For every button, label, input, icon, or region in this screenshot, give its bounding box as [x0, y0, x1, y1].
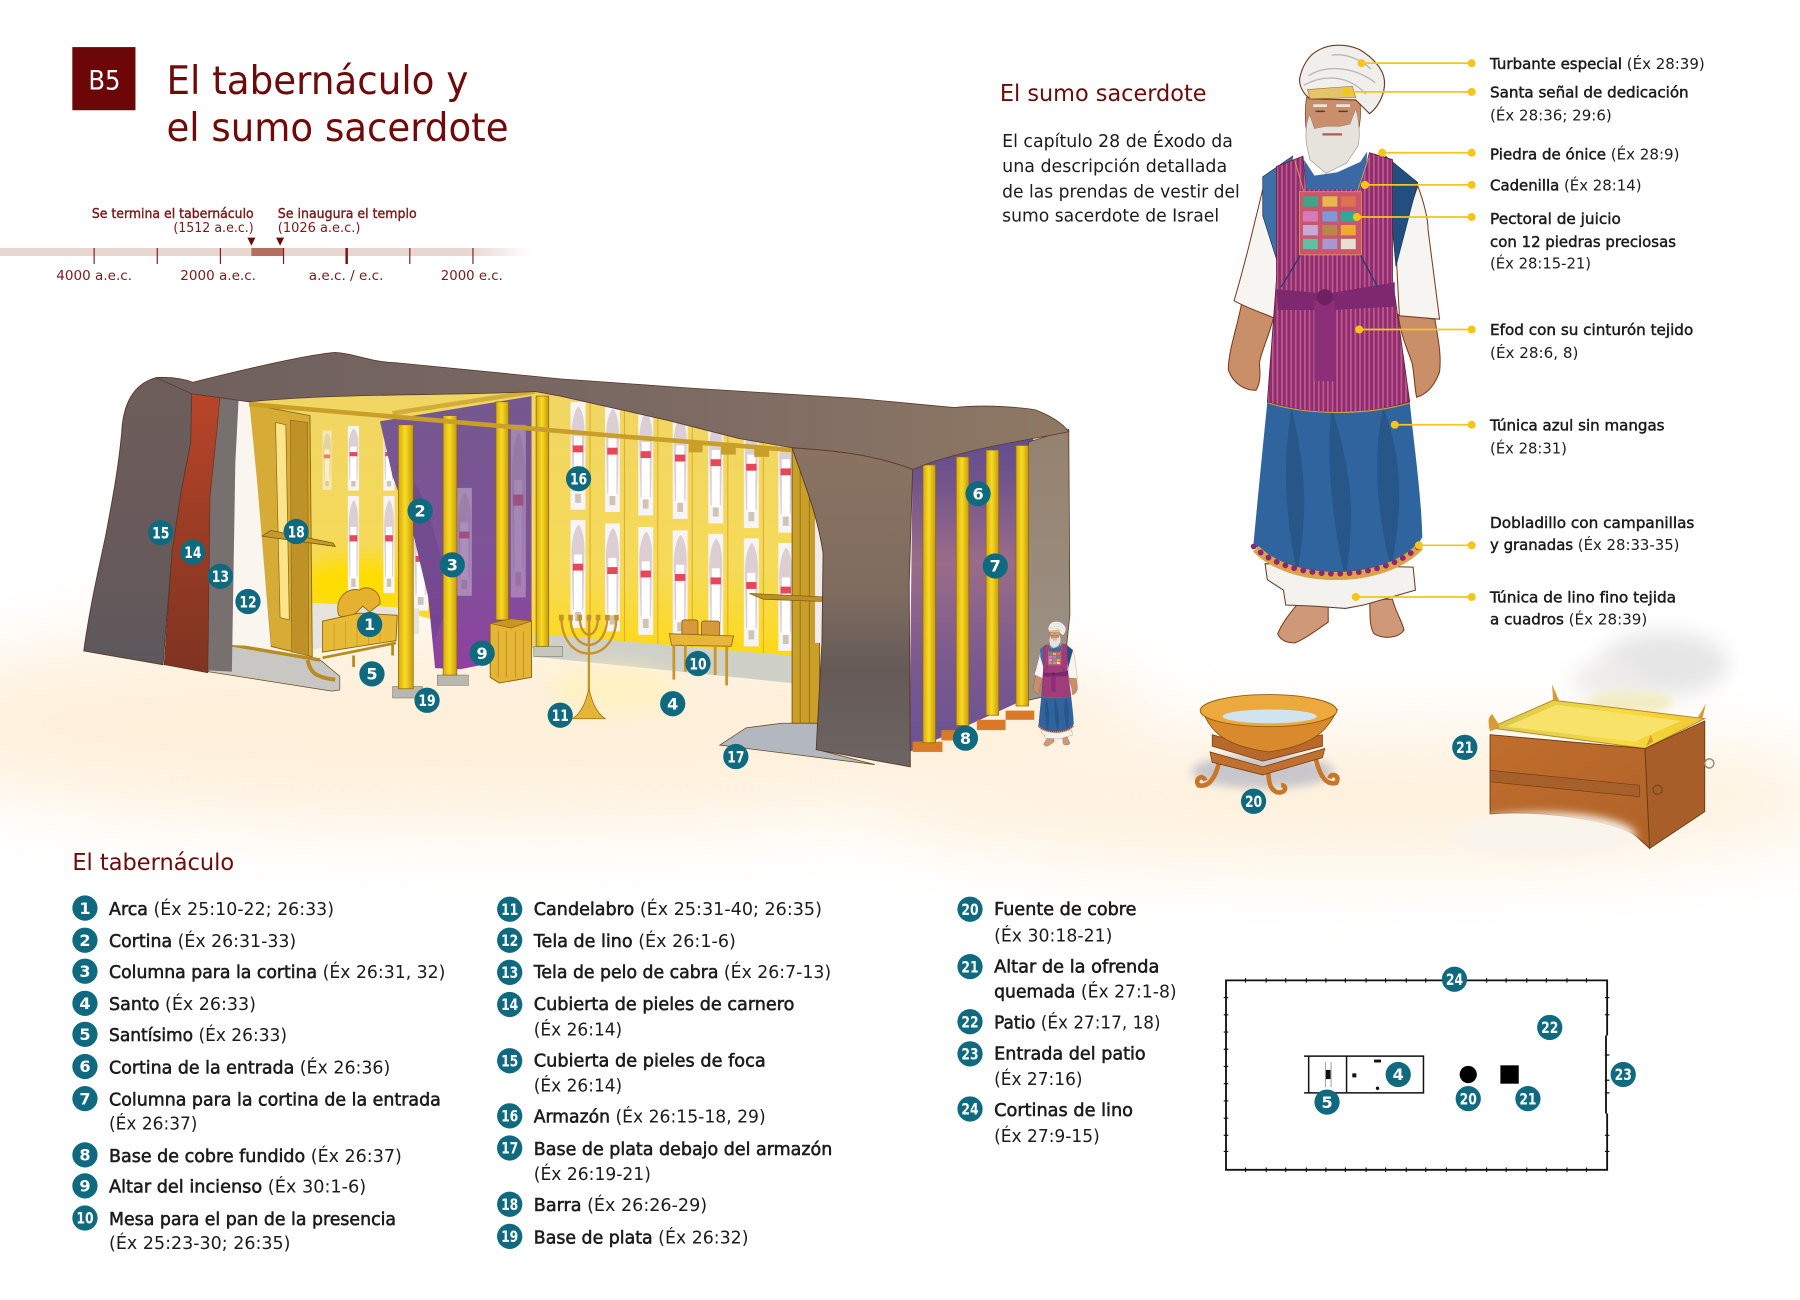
legend column 1: Cortina (Éx 26:31-33): [109, 930, 296, 952]
heading: El sumo sacerdote: El sumo sacerdote: [1000, 79, 1207, 107]
legend column 3: [957, 897, 1177, 1147]
heading: El tabernáculo: El tabernáculo: [72, 848, 234, 876]
floor plan diagram: 24: [1446, 970, 1463, 989]
text block: intro: una descripción detallada: [1002, 156, 1227, 177]
timeline: Se termina el tabernáculo: [92, 207, 254, 222]
legend column 1: 8: [79, 1146, 91, 1165]
legend column 1: Altar del incienso (Éx 30:1-6): [109, 1176, 366, 1198]
legend column 2: [497, 897, 832, 1249]
priest garment labels: Efod con su cinturón tejido: [1490, 321, 1693, 339]
number badges: 8: [960, 729, 971, 748]
legend column 2: 12: [501, 931, 518, 950]
callout lines: [1343, 59, 1476, 601]
legend column 3: 20: [961, 900, 979, 919]
legend column 1: Arca (Éx 25:10-22; 26:33): [109, 898, 334, 920]
legend column 2: Armazón (Éx 26:15-18, 29): [534, 1106, 766, 1128]
legend column 2: 15: [501, 1051, 518, 1070]
priest garment labels: Piedra de ónice (Éx 28:9): [1490, 145, 1679, 164]
legend column 2: 17: [501, 1139, 518, 1158]
legend column 3: (Éx 30:18-21): [994, 924, 1112, 946]
priest garment labels: Turbante especial (Éx 28:39): [1489, 54, 1705, 73]
number badges: 11: [552, 706, 569, 725]
number badges: 3: [447, 556, 458, 575]
timeline: 2000 a.e.c.: [180, 269, 256, 284]
number badges: [148, 466, 1008, 769]
legend column 2: Tela de lino (Éx 26:1-6): [533, 930, 736, 952]
legend column 3: Cortinas de lino: [994, 1100, 1133, 1121]
legend column 3: Patio (Éx 27:17, 18): [994, 1012, 1161, 1034]
illustration: altar of burnt offering: [1452, 631, 1728, 859]
top rail and beam: [249, 391, 792, 457]
legend column 3: (Éx 27:16): [994, 1068, 1083, 1090]
number badges: 7: [990, 557, 1001, 576]
timeline: a.e.c. / e.c.: [309, 269, 383, 284]
title: [166, 58, 509, 151]
number badges: 14: [184, 543, 201, 562]
legend column 1: 9: [79, 1177, 91, 1196]
legend column 2: 18: [501, 1195, 518, 1214]
legend column 1: (Éx 25:23-30; 26:35): [109, 1232, 290, 1254]
legend column 2: Base de plata (Éx 26:32): [534, 1226, 748, 1248]
legend column 3: 21: [961, 957, 979, 976]
number badges: 6: [972, 484, 984, 503]
timeline: (1512 a.e.c.): [173, 221, 254, 236]
legend column 2: Base de plata debajo del armazón: [534, 1139, 832, 1160]
badge 21: 21: [1456, 738, 1473, 757]
legend column 3: Entrada del patio: [994, 1044, 1146, 1065]
legend column 2: 19: [501, 1227, 518, 1246]
legend column 2: Tela de pelo de cabra (Éx 26:7-13): [533, 961, 831, 983]
ark of the covenant: [323, 588, 397, 667]
timeline: (1026 a.e.c.): [278, 221, 360, 236]
badge: B5: B5: [88, 66, 121, 97]
number badges: 9: [477, 644, 488, 663]
text block: intro: [1002, 130, 1240, 227]
number badges: 4: [667, 694, 678, 713]
priest garment labels: (Éx 28:15-21): [1490, 254, 1591, 273]
legend column 2: 11: [501, 900, 518, 919]
front right drape: [792, 448, 913, 767]
priest garment labels: [1489, 54, 1705, 629]
legend column 1: 3: [79, 962, 91, 981]
left coverings: 15 seal, 14 ram, 13 goat, 12 linen: [84, 377, 271, 673]
floor plan diagram: 23: [1615, 1065, 1632, 1084]
legend column 2: Cubierta de pieles de foca: [534, 1050, 766, 1071]
title: El tabernáculo y: [166, 58, 468, 104]
curtain: [380, 396, 532, 669]
legend column 1: 1: [79, 899, 91, 918]
priest garment labels: Cadenilla (Éx 28:14): [1490, 176, 1642, 195]
incense altar: [490, 619, 532, 683]
legend column 1: 5: [79, 1025, 91, 1044]
priest garment labels: a cuadros (Éx 28:39): [1490, 610, 1647, 629]
number badges: 12: [239, 592, 257, 611]
legend column 1: Base de cobre fundido (Éx 26:37): [109, 1145, 402, 1167]
table of showbread: [669, 620, 734, 685]
back wall with angel panels: [249, 388, 804, 684]
legend column 3: quemada (Éx 27:1-8): [994, 981, 1177, 1003]
priest garment labels: Dobladillo con campanillas: [1490, 514, 1694, 532]
priest garment labels: Túnica de lino fino tejida: [1489, 589, 1676, 607]
floor plan diagram: 21: [1519, 1089, 1537, 1108]
legend column 1: 10: [76, 1209, 94, 1228]
priest garment labels: con 12 piedras preciosas: [1490, 233, 1676, 251]
timeline: 4000 a.e.c.: [56, 269, 132, 284]
number badges: 19: [418, 691, 436, 710]
legend column 1: Santo (Éx 26:33): [109, 993, 256, 1015]
floor glow by lampstand: [551, 666, 677, 712]
legend column 1: Columna para la cortina (Éx 26:31, 32): [109, 961, 445, 983]
priest garment labels: (Éx 28:6, 8): [1490, 343, 1578, 362]
text block: intro: El capítulo 28 de Éxodo da: [1002, 130, 1233, 152]
number badges: 1: [364, 615, 375, 634]
legend column 2: 14: [501, 995, 518, 1014]
number badges: 13: [212, 567, 229, 586]
right frames and crossbar: [750, 450, 824, 723]
legend column 3: 24: [961, 1100, 979, 1119]
floor plan diagram: 5: [1321, 1093, 1333, 1112]
small priest: [1033, 621, 1077, 746]
legend column 1: 6: [79, 1057, 91, 1076]
timeline: 2000 e.c.: [441, 269, 503, 284]
number badges: 15: [152, 523, 169, 542]
legend column 1: (Éx 26:37): [109, 1113, 197, 1135]
illustration: tabernacle: [84, 352, 1077, 769]
legend column 1: Santísimo (Éx 26:33): [109, 1024, 287, 1046]
number badges: 17: [727, 747, 744, 766]
number badges: 10: [689, 654, 707, 673]
legend column 2: (Éx 26:14): [534, 1018, 622, 1040]
floor plan diagram: 22: [1541, 1018, 1558, 1037]
legend column 1: 2: [79, 931, 91, 950]
priest garment labels: (Éx 28:31): [1490, 438, 1567, 457]
lampstand: [559, 616, 619, 719]
legend column 3: (Éx 27:9-15): [994, 1125, 1100, 1147]
title: el sumo sacerdote: [166, 105, 509, 151]
timeline: Se inaugura el templo: [278, 207, 417, 222]
entrance columns with copper bases: [913, 445, 1034, 752]
illustration: high priest: [1228, 45, 1440, 643]
number badges: 16: [570, 469, 587, 488]
legend column 1: Mesa para el pan de la presencia: [109, 1209, 396, 1230]
entrance curtain: [909, 436, 1033, 752]
badge 21: [1452, 735, 1477, 760]
legend column 2: (Éx 26:14): [534, 1075, 622, 1097]
number badges: 5: [366, 665, 378, 684]
badge 20: [1241, 789, 1266, 814]
right side panel of covering: [1029, 429, 1070, 700]
legend column 3: 22: [961, 1012, 979, 1031]
legend column 3: 23: [961, 1045, 979, 1064]
legend column 1: Columna para la cortina de la entrada: [109, 1090, 441, 1111]
number badges: 2: [415, 502, 426, 521]
number badges: 18: [288, 522, 305, 541]
legend column 1: 7: [79, 1089, 91, 1108]
floor plan diagram: [1224, 967, 1636, 1172]
timeline: [0, 207, 532, 284]
illustration: bronze laver: [1192, 695, 1337, 792]
text block: intro: de las prendas de vestir del: [1002, 181, 1240, 202]
badge 20: 20: [1245, 792, 1262, 811]
legend column 2: (Éx 26:19-21): [534, 1163, 651, 1185]
legend column 2: 13: [501, 963, 518, 982]
legend column 1: 4: [79, 994, 91, 1013]
legend column 2: Barra (Éx 26:26-29): [534, 1194, 707, 1216]
legend column 3: Fuente de cobre: [994, 899, 1136, 920]
priest garment labels: Santa señal de dedicación: [1490, 84, 1689, 102]
priest garment labels: Pectoral de juicio: [1490, 210, 1621, 228]
silver base under frame: [720, 723, 875, 765]
priest garment labels: y granadas (Éx 28:33-35): [1490, 535, 1679, 554]
legend column 2: Cubierta de pieles de carnero: [534, 994, 794, 1015]
legend column 3: Altar de la ofrenda: [994, 956, 1159, 977]
priest garment labels: Túnica azul sin mangas: [1489, 417, 1665, 435]
roof covering: [156, 352, 1069, 470]
legend column 2: 16: [501, 1107, 518, 1126]
priest garment labels: (Éx 28:36; 29:6): [1490, 106, 1612, 125]
background: warm ground glow: [0, 622, 1800, 864]
left end frames: [208, 404, 340, 691]
legend column 1: Cortina de la entrada (Éx 26:36): [109, 1056, 390, 1078]
text block: intro: sumo sacerdote de Israel: [1002, 206, 1219, 227]
legend column 1: [72, 895, 445, 1254]
legend column 2: Candelabro (Éx 25:31-40; 26:35): [534, 898, 822, 920]
floor plan diagram: 4: [1393, 1065, 1404, 1084]
badge: B5: [72, 47, 135, 110]
floor plan diagram: 20: [1460, 1089, 1477, 1108]
columns and silver bases: [393, 396, 562, 698]
